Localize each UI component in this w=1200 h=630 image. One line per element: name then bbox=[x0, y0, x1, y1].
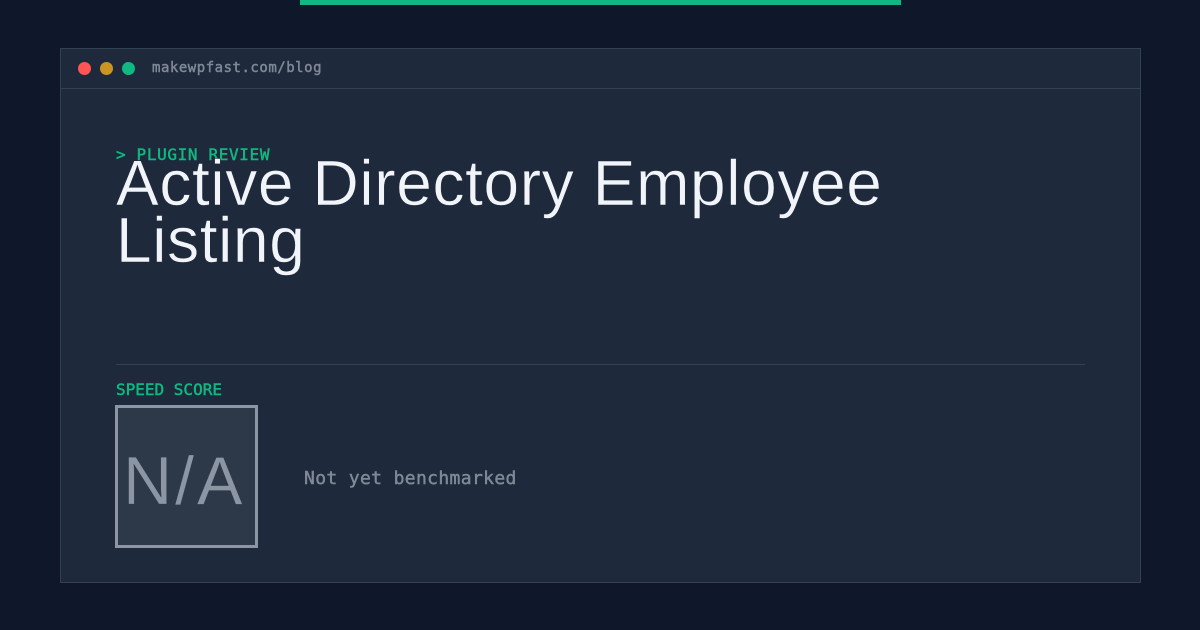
title: Active Directory Employee bbox=[116, 147, 882, 219]
score note: Not yet benchmarked bbox=[304, 468, 517, 489]
panel: browser window bbox=[60, 48, 1141, 583]
icon: green window dot bbox=[122, 62, 135, 75]
icon: amber window dot bbox=[100, 62, 113, 75]
speed score label: SPEED SCORE bbox=[116, 380, 222, 399]
icon: red window dot bbox=[78, 62, 91, 75]
title bbox=[116, 147, 882, 276]
eyebrow label: > PLUGIN REVIEW bbox=[116, 145, 270, 164]
url text: makewpfast.com/blog bbox=[152, 60, 322, 76]
score box bbox=[115, 405, 258, 548]
score value: N/A bbox=[123, 443, 245, 519]
divider bbox=[116, 364, 1085, 365]
window title bar bbox=[61, 49, 1140, 89]
title: Listing bbox=[116, 204, 305, 276]
top accent bar bbox=[300, 0, 901, 5]
